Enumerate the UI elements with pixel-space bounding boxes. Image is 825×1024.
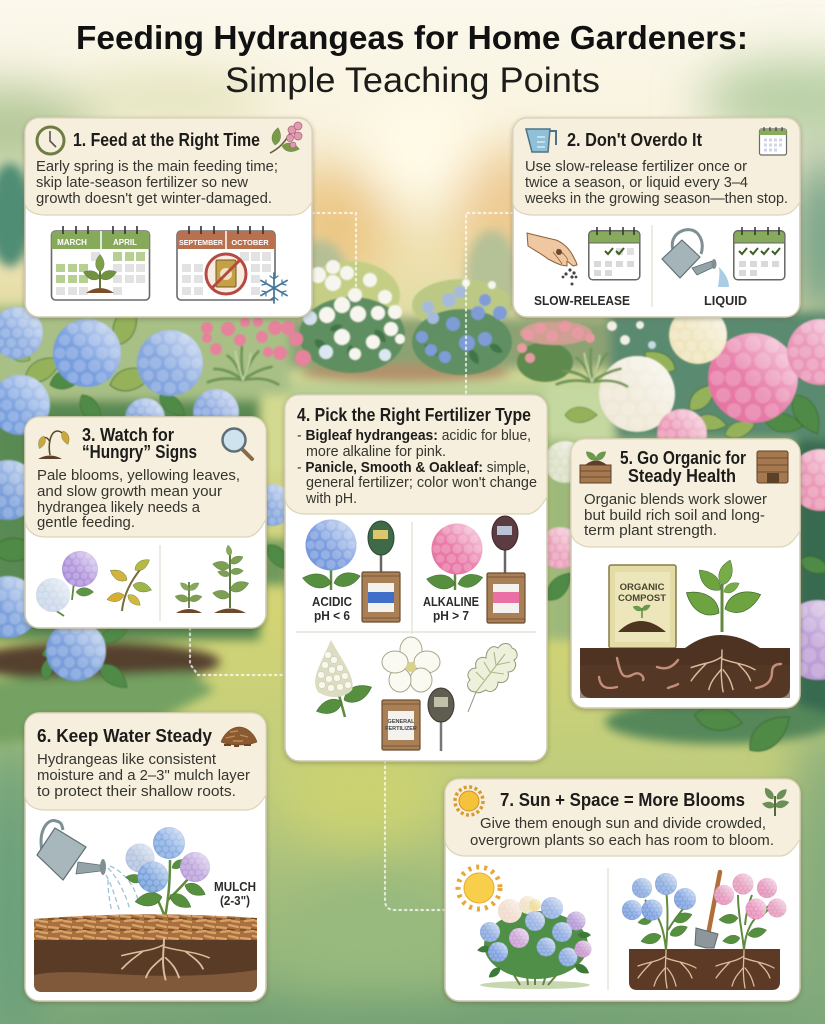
general fertilizer bag: FERTILIZER [385, 726, 417, 732]
calendar with four checks [734, 227, 785, 280]
illustration: blooming shrub [477, 896, 592, 989]
connector: dotted path from card 1 [312, 213, 356, 290]
left pink bush [201, 317, 311, 366]
body text: with pH. [305, 490, 357, 507]
body text: but build rich soil and long- [584, 507, 765, 524]
icon: wilted plant [36, 430, 71, 459]
illustration: compost bag: ORGANIC [620, 582, 665, 593]
panel: 6 keep water steady [25, 713, 266, 1001]
body text: twice a season, or liquid every 3–4 [525, 174, 748, 191]
acidic: blue bloom, meter and bag: ACIDIC [312, 595, 352, 609]
soil [629, 949, 780, 990]
watering can and water [37, 821, 138, 912]
panicle bloom [314, 640, 375, 718]
body text: term plant strength. [584, 522, 717, 539]
connector: dotted path from card 3 [190, 628, 285, 675]
body text: to protect their shallow roots. [37, 783, 236, 800]
connector: dotted path to card 7 [385, 761, 445, 910]
general fertilizer bag: GENERAL [388, 719, 415, 725]
heading: 1. Feed at the Right Time [73, 130, 260, 150]
body text: gentle feeding. [37, 514, 135, 531]
title line 2: Simple Teaching Points [225, 61, 600, 100]
panel: 5 go organic for steady health [571, 439, 800, 708]
panel: 2 don't overdo it [513, 118, 800, 317]
icon: measuring cup [526, 129, 556, 152]
heading: 2. Don't Overdo It [567, 130, 702, 150]
body text: more alkaline for pink. [306, 443, 446, 460]
body text [524, 158, 788, 207]
mulch label: MULCH [214, 880, 256, 894]
heading: 7. Sun + Space = More Blooms [500, 790, 745, 810]
heading: Steady Health [628, 466, 736, 486]
calendar: September and October with no fertilizer [177, 226, 287, 303]
illustration: soil with worms and plant [580, 558, 790, 698]
body text: - Panicle, Smooth & Oakleaf: simple, [297, 459, 530, 476]
general fertilizer bag [382, 700, 420, 750]
body text: general fertilizer; color won't change [306, 474, 537, 491]
calendar: March and April: APRIL [113, 238, 137, 247]
heading: 6. Keep Water Steady [37, 726, 212, 746]
icon: small sun [455, 787, 483, 815]
illustration: compost bag: COMPOST [618, 593, 666, 604]
panel: 3 watch for hungry signs [25, 417, 266, 628]
body text: growth doesn't get winter-damaged. [36, 190, 272, 207]
illustration: compost bag [609, 565, 676, 648]
icon: small calendar [760, 127, 786, 155]
illustration: divided plants with shovel [622, 872, 786, 990]
pink plant [714, 874, 786, 950]
label: LIQUID [704, 294, 747, 308]
icon: hand sprinkling [527, 233, 577, 266]
body text: overgrown plants so each has room to bloom. [470, 832, 774, 849]
heading [82, 425, 197, 462]
title [76, 19, 748, 100]
heading: 5. Go Organic for [620, 448, 746, 468]
connector: dotted path from card 2 [466, 213, 513, 393]
hydrangea plant with blooms [125, 827, 210, 918]
heading: 3. Watch for [82, 425, 174, 445]
liquid illustration [662, 227, 785, 308]
sage haze behind the bushes [292, 240, 348, 320]
heading: “Hungry” Signs [82, 442, 197, 462]
body text [470, 815, 774, 849]
panel: 4 pick the right fertilizer type [285, 395, 547, 761]
icon: watering can [662, 230, 716, 278]
panel: 7 sun + space = more blooms [445, 779, 800, 1001]
calendar with two checks [589, 227, 640, 280]
body text [37, 751, 250, 800]
icon: leafy sprig [762, 786, 790, 816]
body text: - Bigleaf hydrangeas: acidic for blue, [297, 427, 531, 444]
icon: blossom sprig [270, 122, 302, 153]
body text: Pale blooms, yellowing leaves, [37, 467, 240, 484]
soil cross-section with mulch and roots [34, 914, 257, 992]
heading [620, 448, 746, 486]
body text [37, 467, 240, 531]
icon: magnifying glass [222, 428, 252, 459]
mulch label [214, 880, 256, 908]
icon: clock [37, 127, 64, 154]
blue plant [622, 873, 696, 950]
icon: planter box [580, 449, 611, 483]
body text: skip late-season fertilizer so new [36, 174, 248, 191]
body text: Give them enough sun and divide crowded, [480, 815, 766, 832]
alkaline: pink bloom, meter and bag: ALKALINE [423, 595, 479, 609]
illustration: pale blooms and yellow leaves [36, 551, 153, 616]
slow-release illustration [527, 227, 640, 308]
acidic: blue bloom, meter and bag [301, 520, 400, 623]
shovel [695, 872, 720, 948]
calendar: March and April [52, 226, 150, 300]
smooth hydrangea flower [382, 637, 440, 692]
soil meter [428, 688, 454, 751]
alkaline: pink bloom, meter and bag: pH > 7 [433, 609, 469, 623]
body text: Use slow-release fertilizer once or [525, 158, 747, 175]
body text: moisture and a 2–3" mulch layer [37, 767, 250, 784]
icon: compost bin [757, 451, 788, 483]
oak leaf [468, 644, 517, 712]
body text [584, 491, 767, 539]
body text: and slow growth mean your [37, 483, 222, 500]
label: SLOW-RELEASE [534, 294, 630, 308]
white bush [300, 261, 400, 329]
acidic: blue bloom, meter and bag: pH < 6 [314, 609, 350, 623]
heading: 4. Pick the Right Fertilizer Type [297, 405, 531, 425]
body text: Organic blends work slower [584, 491, 767, 508]
calendar: March and April: MARCH [57, 238, 87, 247]
body text: hydrangea likely needs a [37, 499, 201, 516]
blue bush [412, 279, 512, 331]
body text: Hydrangeas like consistent [37, 751, 217, 768]
calendar: September and October with no fertilizer: OCTOBER [231, 238, 269, 247]
body text: Early spring is the main feeding time; [36, 158, 278, 175]
right pink bush [517, 342, 573, 382]
body text [36, 158, 278, 207]
icon: mulch pile [221, 727, 257, 746]
panel: 1 feed at the right time [25, 118, 312, 317]
alkaline: pink bloom, meter and bag [423, 516, 525, 623]
illustration: small and larger seedlings [174, 545, 250, 613]
mulch label: (2-3") [220, 894, 250, 908]
title line 1: Feeding Hydrangeas for Home Gardeners: [76, 19, 748, 56]
illustration: sun [458, 867, 500, 909]
body text [297, 427, 537, 507]
calendar: September and October with no fertilizer: SEPTEMBER [179, 238, 224, 247]
body text: weeks in the growing season—then stop. [524, 190, 788, 207]
